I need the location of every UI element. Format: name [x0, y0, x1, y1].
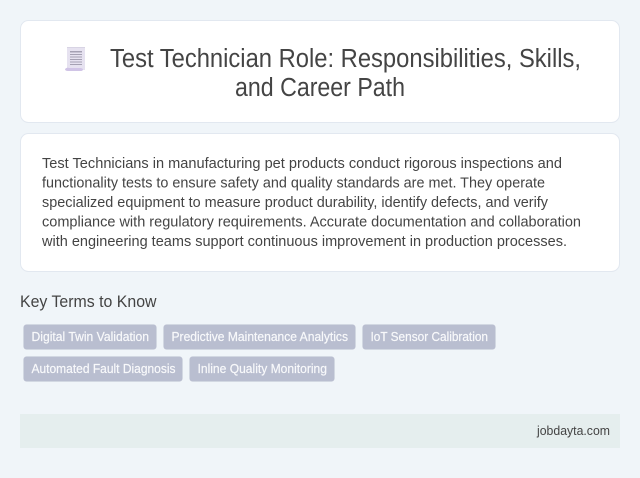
description text — [41, 155, 581, 250]
chip: automated fault diagnosis — [24, 356, 182, 382]
description text: compliance with regulatory requirements. Accurate documentation and collaboration — [42, 214, 581, 230]
chip: iot sensor calibration: IoT Sensor Calibration — [370, 330, 488, 344]
panel: description card — [20, 134, 620, 272]
chip: inline quality monitoring: Inline Quality Monitoring — [198, 362, 327, 376]
chip: inline quality monitoring — [190, 356, 334, 382]
title: Test Technician Role: Responsibilities, Skills, — [110, 45, 581, 73]
chip: digital twin validation: Digital Twin Validation — [32, 330, 149, 344]
chip: digital twin validation — [24, 324, 156, 350]
chip: predictive maintenance analytics: Predictive Maintenance Analytics — [172, 330, 348, 344]
description text: Test Technicians in manufacturing pet products conduct rigorous inspections and — [42, 155, 562, 172]
chip: automated fault diagnosis: Automated Fault Diagnosis — [32, 362, 176, 376]
footer source text: jobdayta.com — [536, 424, 610, 438]
heading: key terms: Key Terms to Know — [20, 293, 157, 311]
panel: header card — [20, 20, 620, 122]
icon: document scroll — [65, 47, 85, 71]
chip list — [24, 324, 496, 382]
description text: specialized equipment to measure product durability, identify defects, and verify — [42, 194, 548, 211]
description text: with engineering teams support continuous improvement in production processes. — [41, 233, 567, 250]
description text: functionality tests to ensure safety and quality standards are met. They operate — [42, 174, 545, 192]
title: and Career Path — [235, 74, 405, 102]
footer bar — [20, 414, 620, 448]
chip: predictive maintenance analytics — [164, 324, 356, 350]
chip: iot sensor calibration — [362, 324, 496, 350]
title — [110, 45, 581, 102]
